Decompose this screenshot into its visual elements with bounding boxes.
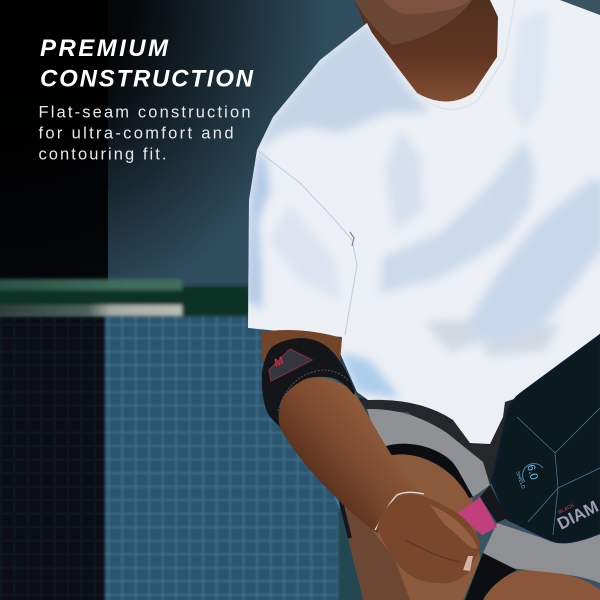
player: thigh [345, 454, 600, 600]
paddle grip [458, 497, 497, 535]
title [40, 35, 254, 92]
green fence rail [0, 279, 250, 316]
brace logo: M [272, 355, 286, 370]
title: PREMIUM [40, 35, 169, 62]
paddle collar [480, 485, 507, 523]
player: neck and chin [355, 0, 527, 110]
player: upper arm [261, 330, 342, 362]
description text: for ultra-comfort and [38, 124, 234, 142]
pickleball paddle: 6.0 [524, 463, 540, 481]
paddle badge [523, 464, 543, 482]
description text: contouring fit. [38, 146, 166, 164]
title: CONSTRUCTION [40, 66, 254, 92]
player: shorts [328, 397, 600, 600]
description text: Flat-seam construction [38, 104, 250, 122]
hand [377, 494, 480, 584]
player: forearm [277, 377, 425, 533]
player: white t-shirt [246, 0, 600, 444]
paddle small text: SHIELD [514, 471, 526, 490]
pickleball paddle: BLACK [557, 502, 576, 516]
elbow brace [262, 338, 355, 427]
pickleball paddle [480, 335, 600, 542]
description text [38, 104, 250, 164]
bracelet [375, 492, 424, 530]
